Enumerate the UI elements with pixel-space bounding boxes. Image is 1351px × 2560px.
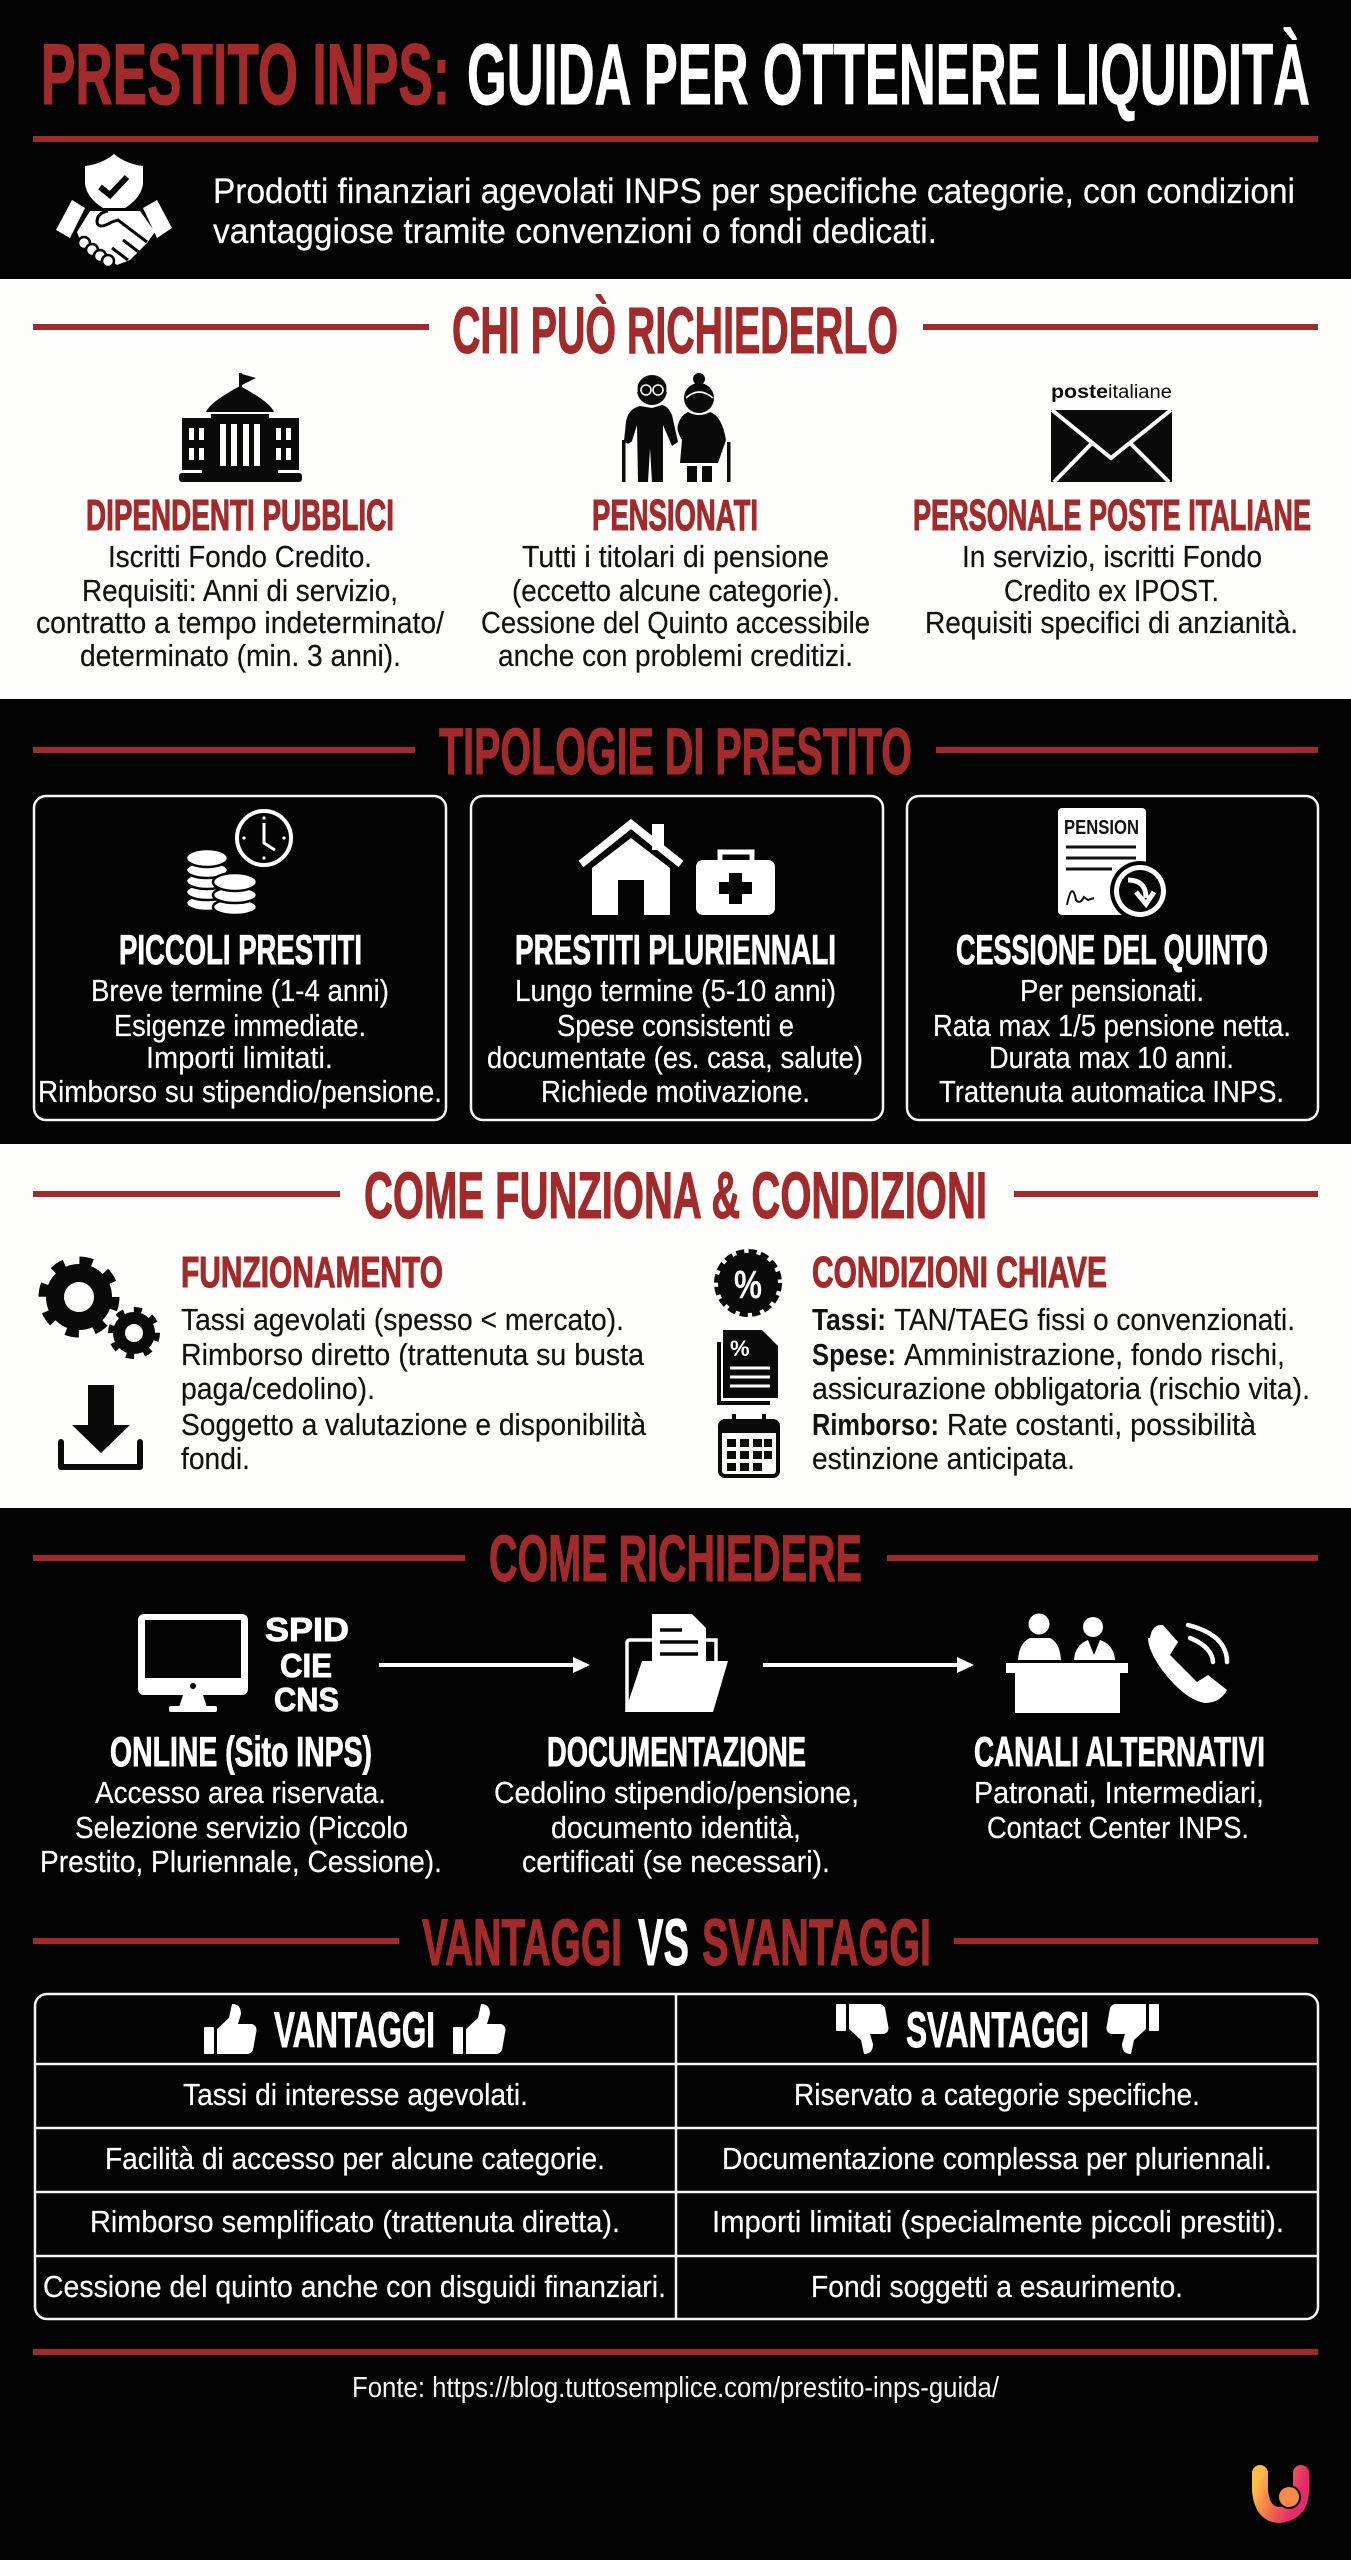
- column: dipendenti pubblici: [36, 373, 444, 673]
- icon: poste italiane envelope: poste: [1051, 382, 1108, 403]
- icon: house and medical kit: [581, 824, 775, 915]
- description: Importi limitati.: [146, 1040, 333, 1075]
- block: funzionamento: fondi.: [181, 1441, 250, 1476]
- block: condizioni chiave: Spese:: [812, 1337, 896, 1372]
- block: funzionamento: Tassi agevolati (spesso < mercato).: [181, 1302, 624, 1337]
- description: [36, 539, 444, 673]
- description: Per pensionati.: [1020, 973, 1204, 1008]
- arrow: documentazione to canali alternativi: [763, 1657, 974, 1673]
- description: [487, 973, 863, 1109]
- intro text: vantaggiose tramite convenzioni o fondi dedicati.: [213, 212, 937, 251]
- label: PENSIONATI: [592, 491, 758, 540]
- heading: come richiedere: COME RICHIEDERE: [489, 1521, 862, 1595]
- list: vantaggi: [43, 2077, 666, 2304]
- description: [925, 539, 1298, 640]
- panel: header: [0, 0, 1351, 279]
- icon: coins and clock: [186, 811, 291, 915]
- intro text: Prodotti finanziari agevolati INPS per specifiche categorie, con condizioni: [213, 172, 1295, 211]
- step: documentazione: Cedolino stipendio/pensione,: [494, 1775, 859, 1810]
- icon: thumb up left: [204, 2004, 256, 2054]
- icon: pension document: PENSION: [1064, 817, 1139, 839]
- description: determinato (min. 3 anni).: [80, 638, 401, 673]
- icon: gears: [43, 1261, 157, 1356]
- description: contratto a tempo indeterminato/: [36, 605, 444, 640]
- icon: computer with SPID, CIE, CNS: [138, 1611, 349, 1718]
- icon: thumb up right: [453, 2004, 506, 2054]
- heading: vantaggi vs svantaggi: [33, 1905, 1318, 1979]
- description: Tutti i titolari di pensione: [522, 539, 829, 574]
- description: Iscritti Fondo Credito.: [108, 539, 372, 574]
- block: condizioni chiave: Tassi:: [812, 1302, 886, 1337]
- icon: brand logo: [1260, 2473, 1301, 2515]
- heading: vantaggi vs svantaggi: VS: [638, 1905, 689, 1979]
- icon: poste italiane envelope: [1051, 382, 1172, 482]
- heading: vantaggi vs svantaggi: VANTAGGI: [422, 1905, 622, 1979]
- icon: counter and phone: [1006, 1614, 1227, 1713]
- description: Spese consistenti e: [557, 1008, 794, 1043]
- description: [481, 539, 870, 673]
- panel: tipologie di prestito: [0, 699, 1351, 1144]
- icon: computer with SPID, CIE, CNS: CNS: [274, 1681, 339, 1718]
- icon: shield and handshake: [56, 154, 172, 267]
- description: Richiede motivazione.: [541, 1074, 810, 1109]
- description: documentate (es. casa, salute): [487, 1040, 863, 1075]
- block: condizioni chiave: [812, 1248, 1310, 1476]
- icon: calendar: [720, 1414, 778, 1476]
- block: condizioni chiave: TAN/TAEG fissi o convenzionati.: [894, 1302, 1295, 1337]
- icon: thumb down left: [836, 2004, 888, 2054]
- description: Requisiti: Anni di servizio,: [82, 573, 398, 608]
- icon: public building: [179, 373, 302, 482]
- block: funzionamento: Rimborso diretto (trattenuta su busta: [181, 1337, 645, 1372]
- icon: elderly couple: [622, 373, 730, 482]
- list: vantaggi: Cessione del quinto anche con disguidi finanziari.: [43, 2269, 666, 2304]
- description: [38, 973, 442, 1109]
- block: funzionamento: Soggetto a valutazione e disponibilità: [181, 1407, 647, 1442]
- card: prestiti pluriennali: [471, 796, 883, 1120]
- title: PICCOLI PRESTITI: [119, 926, 362, 973]
- heading: tipologie di prestito: TIPOLOGIE DI PRESTITO: [439, 714, 912, 788]
- icon: percent document: %: [730, 1336, 750, 1361]
- column: personale poste italiane: [913, 382, 1311, 640]
- description: (eccetto alcune categorie).: [512, 573, 840, 608]
- block: condizioni chiave: estinzione anticipata.: [812, 1441, 1075, 1476]
- icon: download: [61, 1385, 140, 1467]
- block: condizioni chiave: Rimborso:: [812, 1407, 939, 1442]
- step: canali alternativi: [974, 1728, 1265, 1845]
- icon: computer with SPID, CIE, CNS: CIE: [280, 1647, 332, 1684]
- description: Requisiti specifici di anzianità.: [925, 605, 1298, 640]
- card: piccoli prestiti: [34, 796, 446, 1120]
- description: Lungo termine (5-10 anni): [515, 973, 836, 1008]
- description: Credito ex IPOST.: [1004, 573, 1219, 608]
- step: online: Prestito, Pluriennale, Cessione).: [40, 1844, 442, 1879]
- step: canali alternativi: Patronati, Intermediari,: [974, 1775, 1264, 1810]
- description: Durata max 10 anni.: [989, 1040, 1234, 1075]
- list: svantaggi: Importi limitati (specialmente piccoli prestiti).: [712, 2204, 1284, 2239]
- description: [933, 973, 1291, 1109]
- step: documentazione: [494, 1728, 859, 1879]
- step: documentazione: documento identità,: [551, 1810, 801, 1845]
- card: cessione del quinto: [907, 796, 1318, 1120]
- icon: folder with documents: [625, 1614, 728, 1712]
- step: online: Accesso area riservata.: [95, 1775, 386, 1810]
- heading: chi può richiederlo: [33, 293, 1318, 367]
- list: svantaggi: [712, 2077, 1284, 2304]
- step: documentazione: certificati (se necessari).: [522, 1844, 830, 1879]
- block: condizioni chiave: Rate costanti, possibilità: [947, 1407, 1257, 1442]
- label: DIPENDENTI PUBBLICI: [86, 491, 394, 540]
- block: funzionamento: FUNZIONAMENTO: [181, 1248, 443, 1297]
- heading: come richiedere: [33, 1521, 1318, 1595]
- heading: chi può richiederlo: CHI PUÒ RICHIEDERLO: [452, 293, 898, 367]
- description: In servizio, iscritti Fondo: [962, 539, 1262, 574]
- list: svantaggi: Documentazione complessa per pluriennali.: [722, 2141, 1272, 2176]
- icon: percent document: [719, 1330, 778, 1403]
- step: canali alternativi: Contact Center INPS.: [987, 1810, 1249, 1845]
- arrow: online to documentazione: [379, 1657, 590, 1673]
- source line: Fonte: https://blog.tuttosemplice.com/prestito-inps-guida/: [352, 2372, 1000, 2404]
- description: Breve termine (1-4 anni): [91, 973, 389, 1008]
- panel: vantaggi vs svantaggi: [33, 1905, 1318, 2319]
- block: condizioni chiave: assicurazione obbligatoria (rischio vita).: [812, 1371, 1310, 1406]
- panel: come richiedere: [0, 1508, 1351, 1893]
- icon: poste italiane envelope: italiane: [1108, 382, 1172, 403]
- intro text: [213, 172, 1295, 251]
- icon: percent badge: [717, 1252, 779, 1314]
- panel: chi può richiederlo: [0, 279, 1351, 699]
- list: vantaggi: Tassi di interesse agevolati.: [183, 2077, 528, 2112]
- description: anche con problemi creditizi.: [498, 638, 853, 673]
- icon: percent badge: %: [734, 1263, 762, 1307]
- description: Rimborso su stipendio/pensione.: [38, 1074, 442, 1109]
- title: PRESTITO INPS:: [41, 27, 450, 123]
- title: PRESTITI PLURIENNALI: [515, 926, 836, 973]
- list: svantaggi: Fondi soggetti a esaurimento.: [811, 2269, 1183, 2304]
- block: condizioni chiave: Amministrazione, fondo rischi,: [904, 1337, 1285, 1372]
- heading: vantaggi vs svantaggi: SVANTAGGI: [702, 1905, 931, 1979]
- step: online: [40, 1728, 442, 1879]
- heading: tipologie di prestito: [33, 714, 1318, 788]
- icon: computer with SPID, CIE, CNS: SPID: [265, 1611, 349, 1648]
- description: Rata max 1/5 pensione netta.: [933, 1008, 1291, 1043]
- panel: come funziona e condizioni: [0, 1144, 1351, 1508]
- list: vantaggi: Facilità di accesso per alcune categorie.: [105, 2141, 605, 2176]
- title: [41, 27, 1310, 123]
- icon: pension document: [1058, 808, 1170, 921]
- table head: vantaggi: VANTAGGI: [274, 2002, 435, 2058]
- list: vantaggi: Rimborso semplificato (trattenuta diretta).: [90, 2204, 620, 2239]
- step: documentazione: DOCUMENTAZIONE: [547, 1728, 806, 1775]
- icon: thumb down right: [1106, 2004, 1159, 2054]
- block: condizioni chiave: CONDIZIONI CHIAVE: [812, 1248, 1107, 1297]
- block: funzionamento: paga/cedolino).: [181, 1371, 375, 1406]
- description: Esigenze immediate.: [114, 1008, 366, 1043]
- table head: svantaggi: SVANTAGGI: [906, 2002, 1089, 2058]
- description: Trattenuta automatica INPS.: [939, 1074, 1284, 1109]
- comparison table: [35, 1994, 1318, 2319]
- block: funzionamento: [181, 1248, 647, 1476]
- step: online: ONLINE (Sito INPS): [110, 1728, 372, 1775]
- list: svantaggi: Riservato a categorie specifiche.: [794, 2077, 1200, 2112]
- description: Cessione del Quinto accessibile: [481, 605, 870, 640]
- step: online: Selezione servizio (Piccolo: [75, 1810, 408, 1845]
- column: pensionati: [481, 373, 870, 673]
